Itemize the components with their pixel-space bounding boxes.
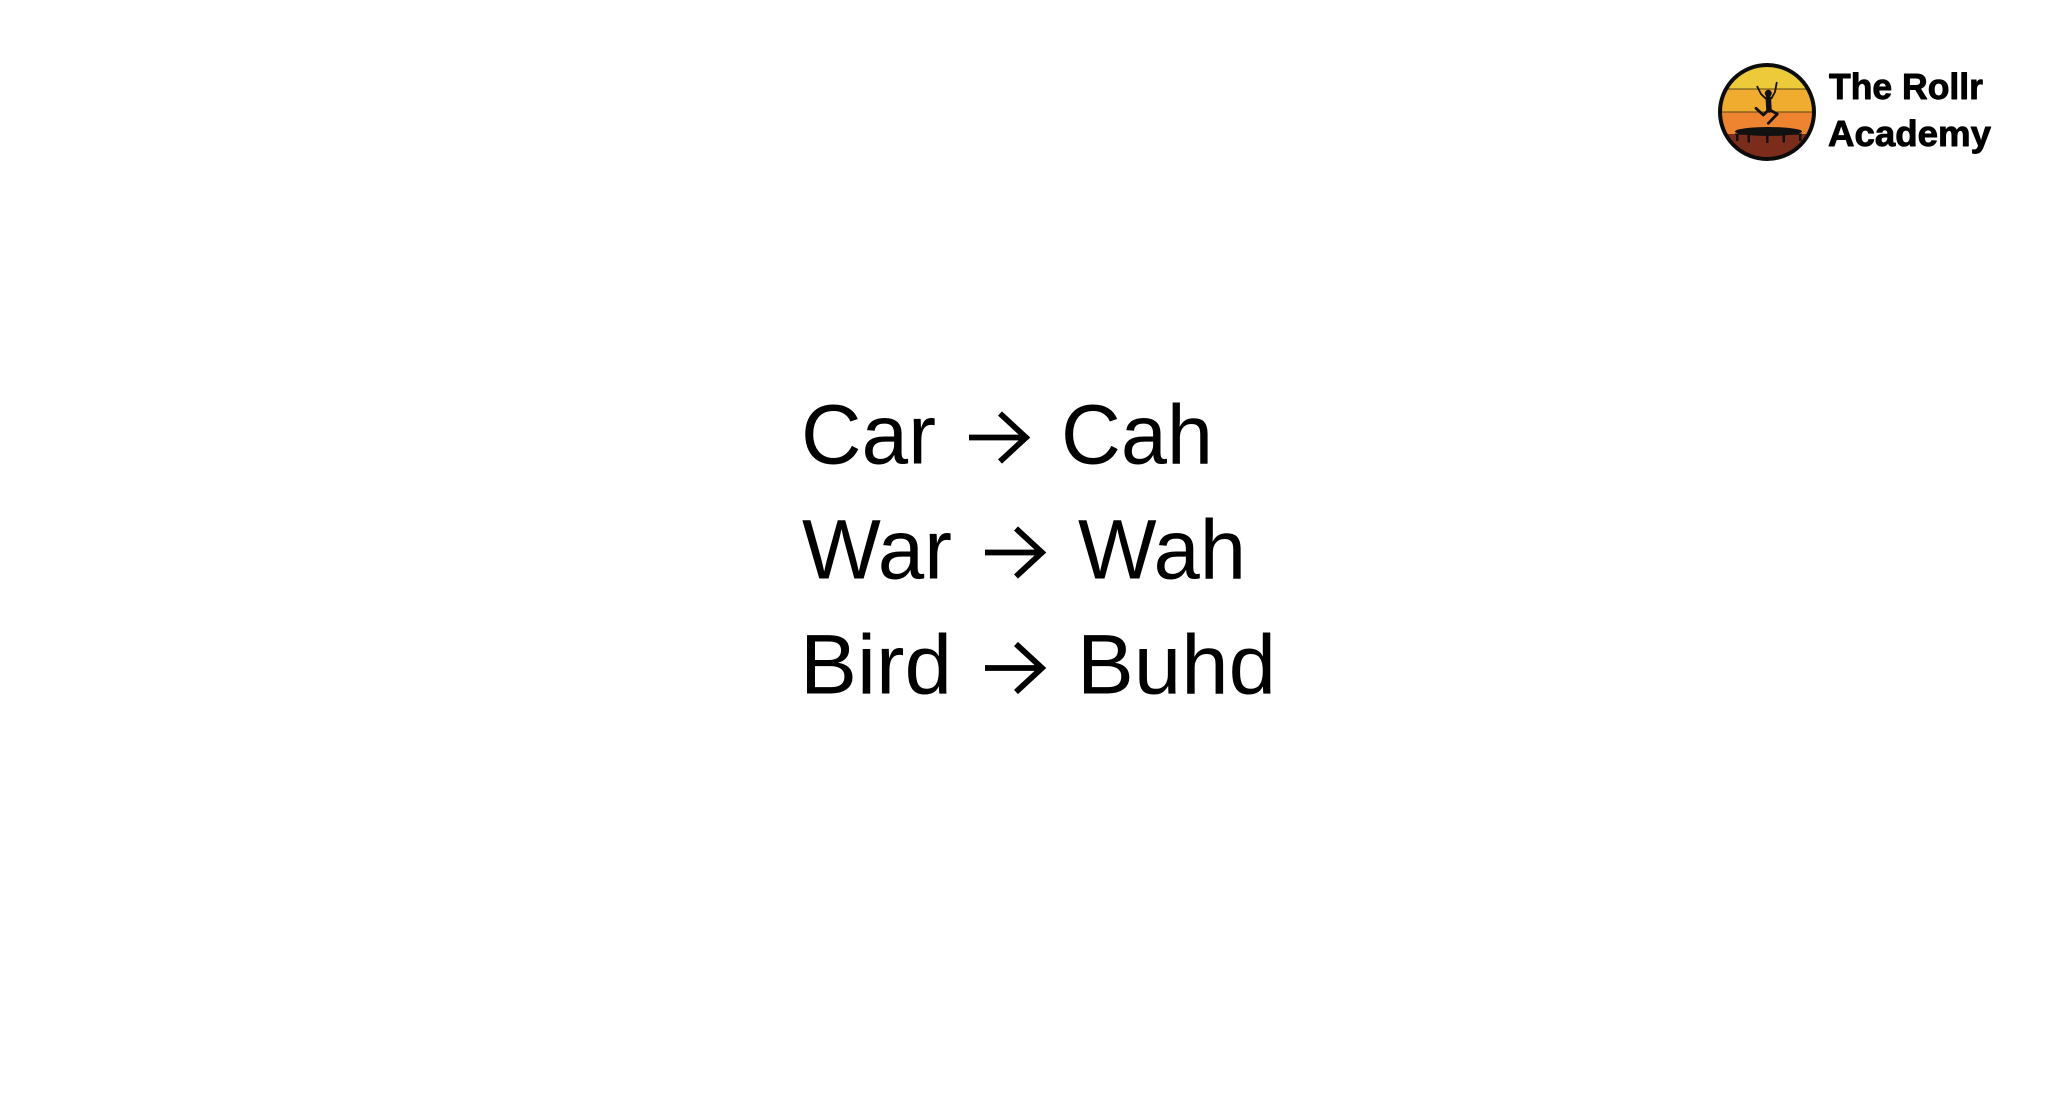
logo text [1828, 66, 1991, 154]
logo text: The Rollr [1829, 66, 1983, 107]
row: Bird to Buhd: Bird [800, 618, 952, 712]
logo text: Academy [1828, 113, 1991, 154]
word list: non-rhotic pronunciation examples [800, 388, 1276, 712]
row: War to Wah: Wah [1078, 502, 1246, 596]
logo icon: sunset circle with trampoline jumper [1717, 62, 1817, 162]
row: Bird to Buhd [800, 618, 1276, 712]
row: War to Wah [802, 502, 1246, 596]
logo: The Rollr Academy [1717, 62, 1991, 162]
row: Bird to Buhd: Buhd [1077, 618, 1276, 712]
row: Car to Cah [801, 388, 1213, 482]
row: Car to Cah: Car [801, 388, 936, 482]
trampoline [1735, 127, 1802, 143]
row: War to Wah: War [802, 502, 952, 596]
row: Car to Cah: Cah [1061, 388, 1213, 482]
jumper silhouette [1756, 83, 1777, 123]
